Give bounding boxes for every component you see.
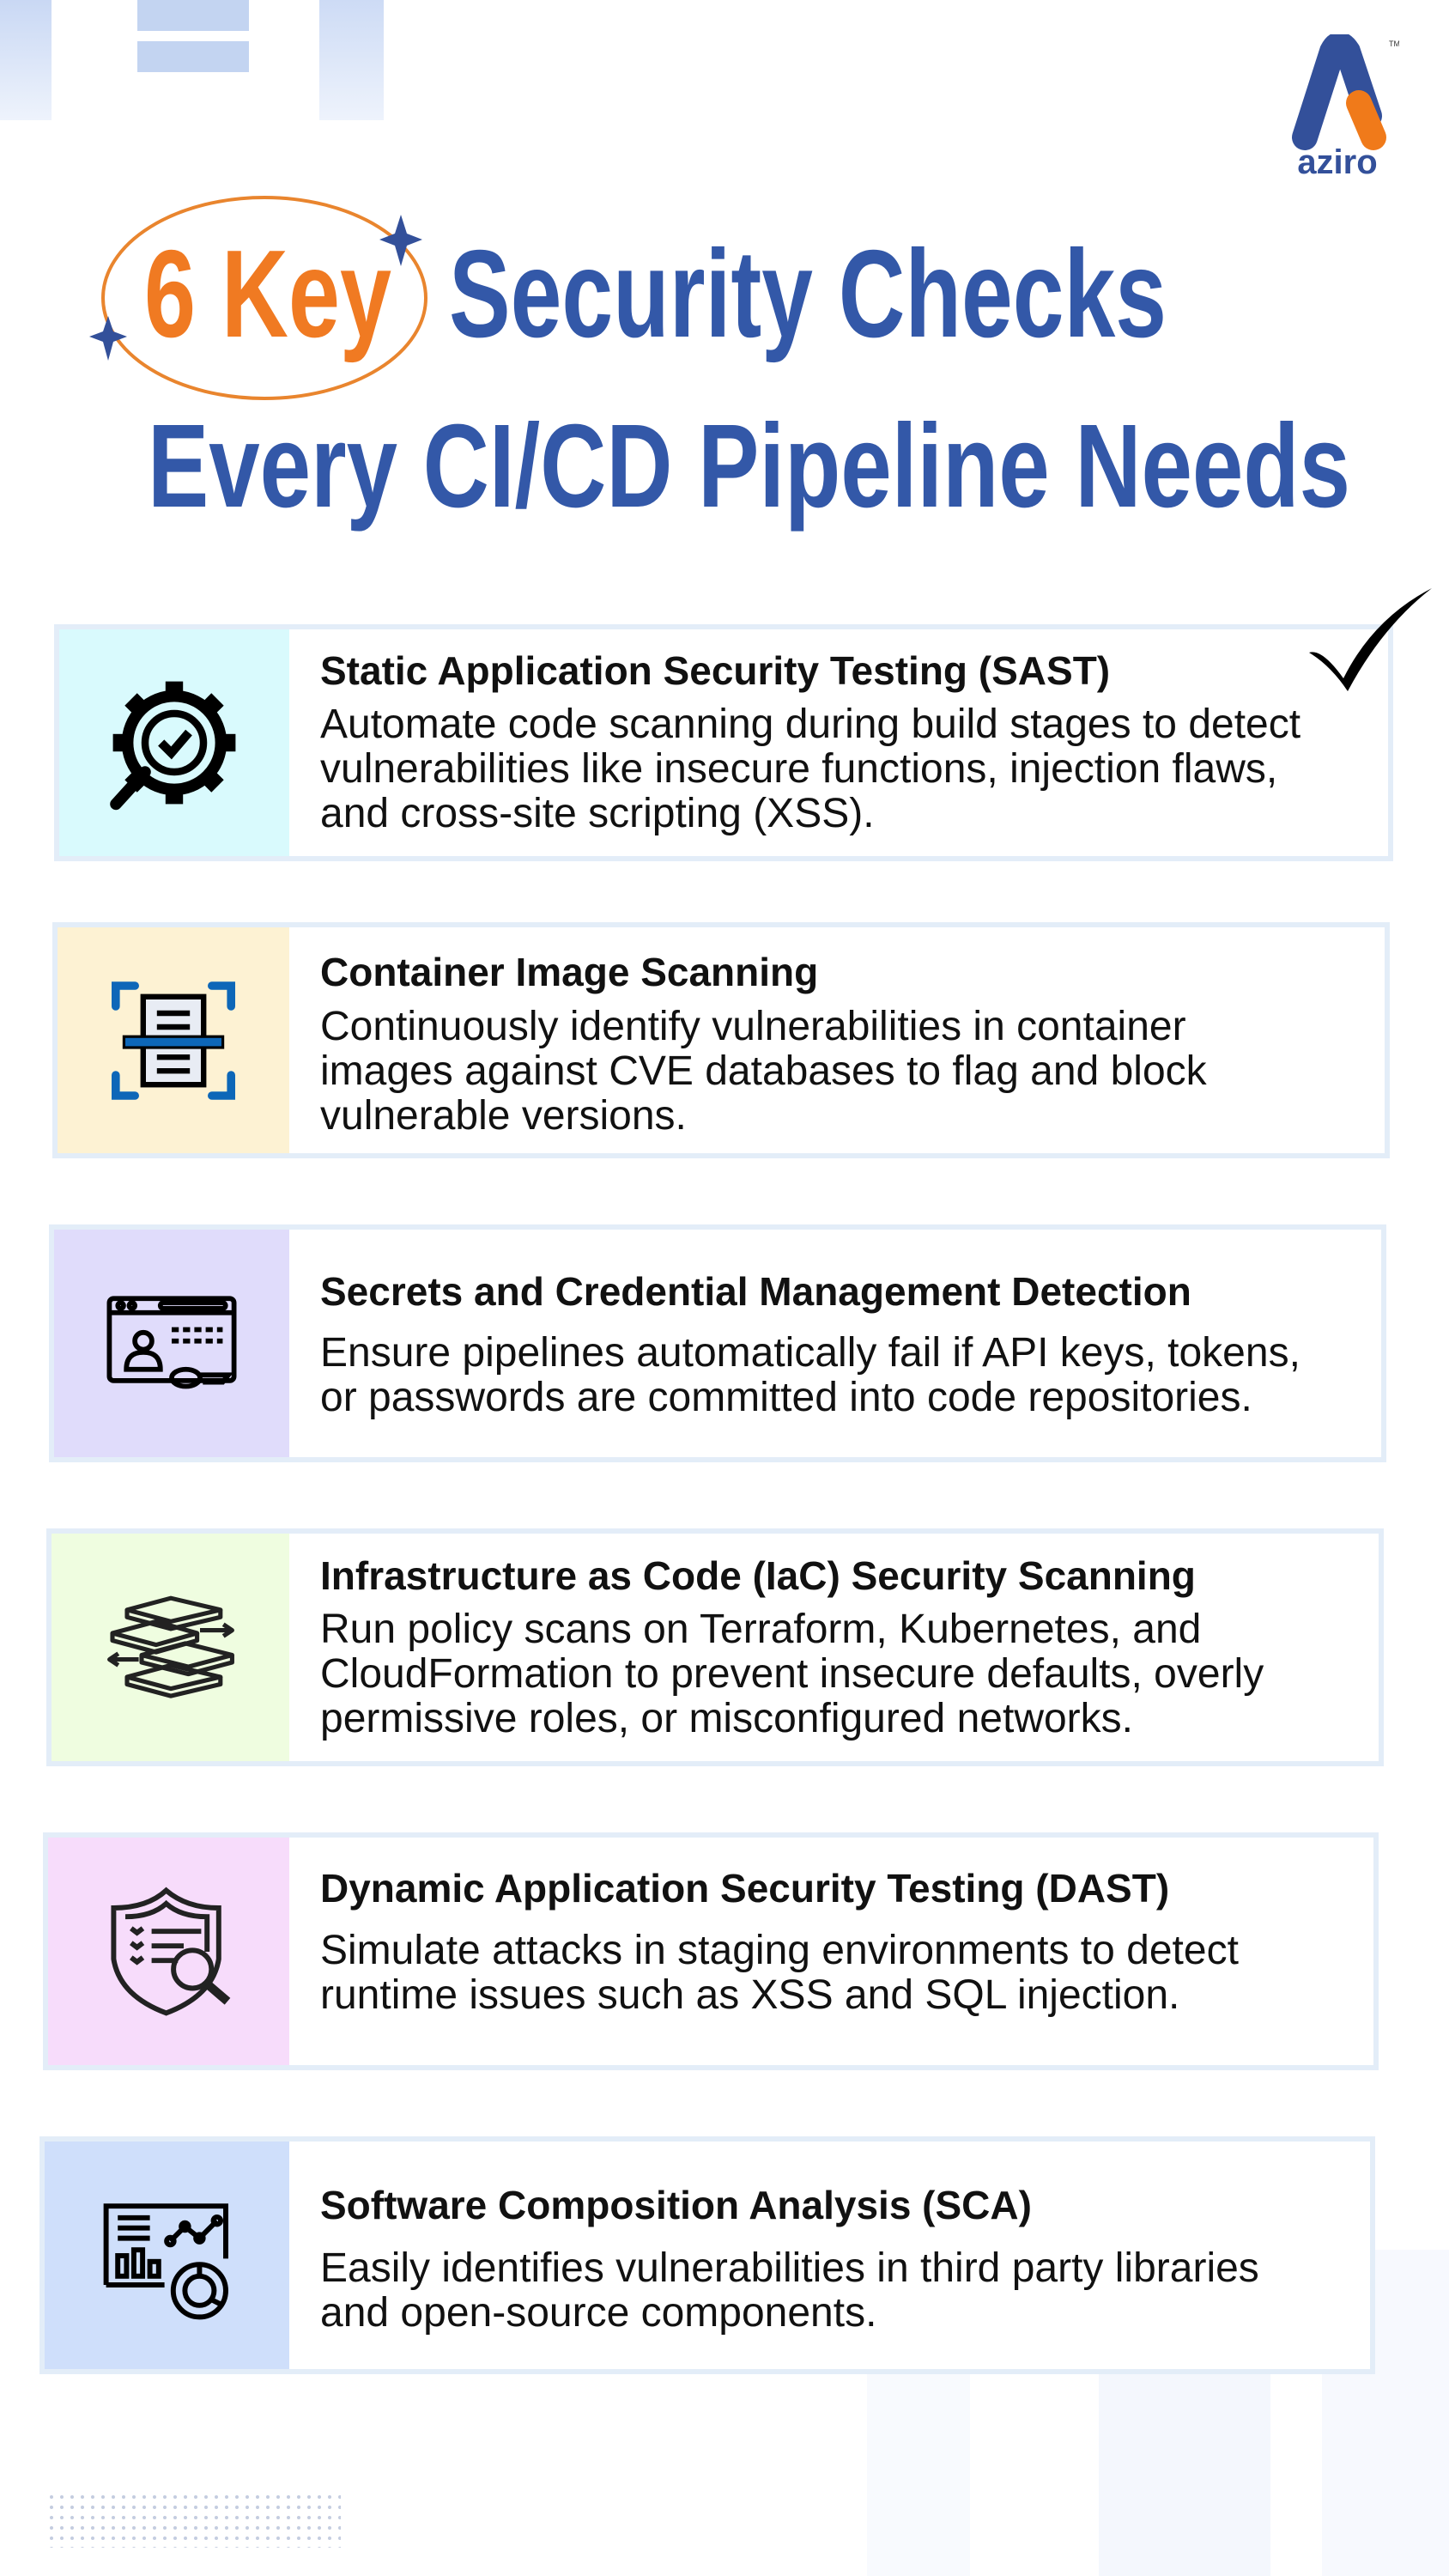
icon panel: shield: [48, 1838, 289, 2065]
description: vulnerable versions.: [320, 1093, 687, 1139]
icon panel: credentials: [54, 1230, 289, 1457]
description: Run policy scans on Terraform, Kubernetes, and: [320, 1607, 1201, 1652]
description: images against CVE databases to flag and block: [320, 1048, 1207, 1094]
title: Static Application Security Testing (SAST): [320, 648, 1110, 693]
description: and cross-site scripting (XSS).: [320, 791, 875, 836]
card 4: IaC: [46, 1528, 1384, 1766]
description: Ensure pipelines automatically fail if API keys, tokens,: [320, 1330, 1300, 1376]
description: CloudFormation to prevent insecure defaults, overly: [320, 1651, 1264, 1697]
description: or passwords are committed into code repositories.: [320, 1375, 1252, 1420]
title: Software Composition Analysis (SCA): [320, 2183, 1032, 2227]
description: Easily identifies vulnerabilities in third party libraries: [320, 2245, 1259, 2291]
description: [320, 1607, 1264, 1741]
title: Secrets and Credential Management Detection: [320, 1269, 1191, 1314]
description: [320, 2245, 1259, 2336]
card 6: SCA: [39, 2136, 1375, 2374]
title: [89, 196, 1350, 532]
description: [320, 1004, 1207, 1139]
description: Simulate attacks in staging environments to detect: [320, 1928, 1239, 1973]
description: permissive roles, or misconfigured networks.: [320, 1696, 1133, 1741]
card 3: secrets: [49, 1224, 1386, 1462]
description: [320, 1330, 1300, 1420]
description: vulnerabilities like insecure functions, injection flaws,: [320, 746, 1277, 792]
description: and open-source components.: [320, 2290, 876, 2336]
card 2: container: [52, 922, 1390, 1158]
icon panel: dashboard: [45, 2142, 289, 2369]
description: Automate code scanning during build stages to detect: [320, 702, 1300, 747]
background decoration top-left: [0, 0, 384, 120]
highlight ellipse: [103, 197, 426, 398]
description: [320, 1928, 1239, 2018]
description: [320, 702, 1300, 836]
sparkle stars: [379, 215, 422, 266]
background decoration bottom-right: [1099, 2374, 1270, 2576]
logo: aziro: aziro: [1297, 143, 1378, 181]
title: 6 Key: [144, 224, 391, 363]
icon: checkmark: [1309, 588, 1432, 691]
title: Infrastructure as Code (IaC) Security Scanning: [320, 1553, 1196, 1598]
icon panel: scan: [58, 927, 289, 1153]
icon panel: gear: [59, 629, 289, 856]
description: Continuously identify vulnerabilities in container: [320, 1004, 1186, 1049]
card 1: SAST: [54, 624, 1393, 861]
title: Dynamic Application Security Testing (DAST): [320, 1866, 1169, 1911]
description: runtime issues such as XSS and SQL injection.: [320, 1972, 1179, 2018]
dotted grid decoration: [50, 2495, 341, 2548]
title: Container Image Scanning: [320, 950, 818, 994]
logo: aziro: [1292, 34, 1399, 181]
icon panel: stacked layers: [52, 1534, 289, 1761]
card 5: DAST: [43, 1832, 1379, 2070]
